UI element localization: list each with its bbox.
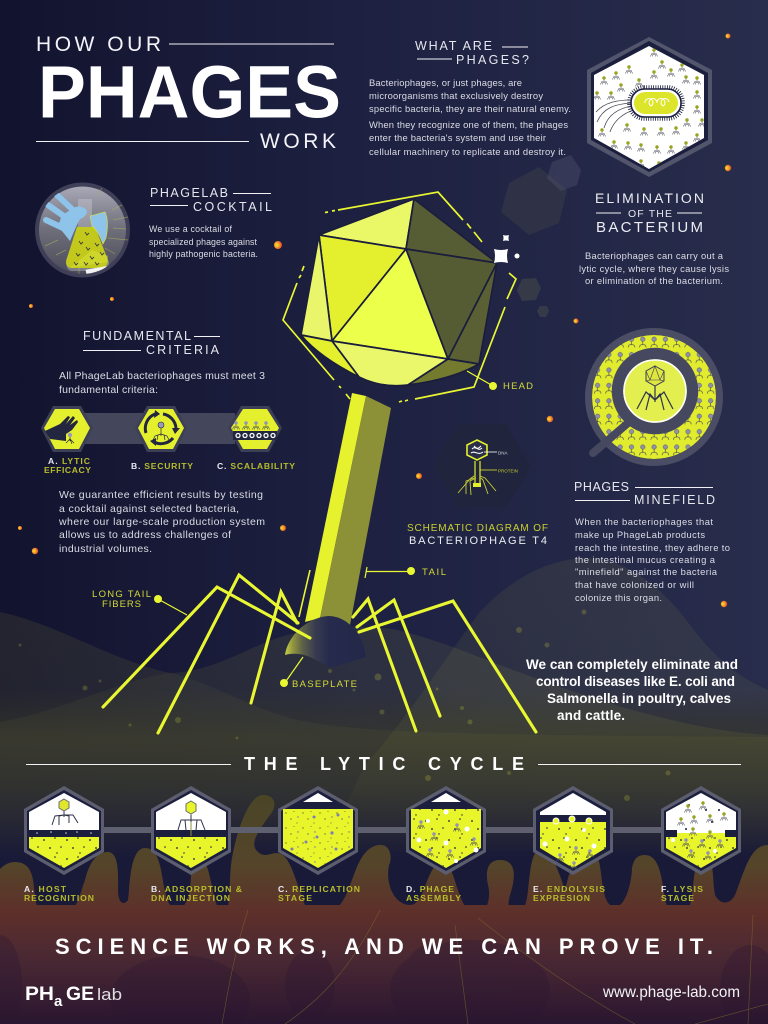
title <box>36 33 341 153</box>
heading: elimination of the bacterium: ELIMINATION <box>595 190 704 206</box>
logo: phagelab: PH <box>25 984 54 1005</box>
lytic cycle stage labels: B. ADSORPTION & <box>151 884 242 894</box>
text block: minefield: reach the intestine, they adhere to <box>575 542 730 553</box>
title: HOW OUR <box>36 33 161 56</box>
criteria labels: A. LYTIC <box>48 456 90 466</box>
label: head <box>467 371 533 392</box>
callout: disease statement <box>526 657 738 723</box>
label: tail <box>365 567 446 578</box>
text block: cocktail <box>149 224 258 259</box>
icon: bacterium surrounded by phages <box>587 37 712 177</box>
schematic hexagon backdrop <box>433 424 531 508</box>
panel: what are phages <box>369 39 571 157</box>
text block: cocktail: highly pathogenic bacteria. <box>149 249 258 259</box>
callout: disease statement: control diseases like E. coli and <box>536 674 735 689</box>
lytic cycle stage labels: STAGE <box>661 893 694 903</box>
criteria labels: C. SCALABILITY <box>217 461 295 471</box>
text block: minefield: colonize this organ. <box>575 592 662 603</box>
criteria labels: EFFICACY <box>44 465 91 475</box>
title: PHAGES <box>38 50 341 134</box>
label: long tail fibers <box>92 589 187 615</box>
label: baseplate <box>280 657 357 690</box>
label: long tail fibers: FIBERS <box>102 599 141 610</box>
heading: fundamental criteria: CRITERIA <box>146 343 220 357</box>
title: WORK <box>260 130 336 153</box>
text block: minefield: make up PhageLab products <box>575 529 705 540</box>
lytic cycle stage labels: C. REPLICATION <box>278 884 360 894</box>
text block: what are phages <box>369 77 571 157</box>
heading: phagelab cocktail: COCKTAIL <box>193 200 272 214</box>
baseplate <box>285 616 366 668</box>
text block: criteria results: industrial volumes. <box>59 543 152 555</box>
panel: elimination of the bacterium <box>579 190 729 286</box>
mini phage schematic: PROTEIN <box>498 468 518 474</box>
heading: the lytic cycle: THE LYTIC CYCLE <box>244 754 524 774</box>
lytic cycle stage labels: EXPRESION <box>533 893 590 903</box>
text block: what are phages: When they recognize one of them, the phages <box>369 119 568 130</box>
lytic cycle stage labels: RECOGNITION <box>24 893 94 903</box>
heading: elimination of the bacterium: OF THE <box>628 208 672 220</box>
label: tail: TAIL <box>422 567 446 578</box>
heading: fundamental criteria: FUNDAMENTAL <box>83 329 191 343</box>
text block: minefield: "minefield" against the bacteria <box>575 566 718 577</box>
schematic caption: BACTERIOPHAGE T4 <box>409 535 547 547</box>
head <box>301 199 497 386</box>
text block: cocktail: specialized phages against <box>149 237 258 247</box>
heading: what are phages <box>415 39 529 67</box>
stage D: phage assembly <box>406 786 486 875</box>
text block: minefield: the intestinal mucus creating a <box>575 554 716 565</box>
lytic cycle stage labels: E. ENDOLYSIS <box>533 884 605 894</box>
lytic cycle stage labels: F. LYSIS <box>661 884 703 894</box>
text block: elimination: or elimination of the bacterium. <box>585 275 723 286</box>
tagline: SCIENCE WORKS, AND WE CAN PROVE IT. <box>55 934 713 959</box>
text block: criteria results: where our large-scale production system <box>58 516 265 528</box>
tail <box>299 393 391 625</box>
heading: phages minefield: PHAGES <box>574 480 629 494</box>
panel: fundamental criteria <box>41 329 295 555</box>
text block: cocktail: We use a cocktail of <box>149 224 233 234</box>
criteria labels <box>44 456 295 475</box>
background waves <box>0 558 768 860</box>
lytic cycle stage labels: D. PHAGE <box>406 884 454 894</box>
criteria labels: B. SECURITY <box>131 461 193 471</box>
label: head: HEAD <box>503 381 533 392</box>
mini phage schematic: DNA <box>498 450 508 456</box>
lytic cycle stage labels: STAGE <box>278 893 312 903</box>
heading: what are phages: PHAGES? <box>456 53 529 67</box>
logo: phagelab <box>25 984 122 1010</box>
text block: elimination <box>579 250 729 286</box>
text block: criteria results: a cocktail against selected bacteria, <box>59 503 239 515</box>
stage A: host recognition <box>24 786 104 875</box>
text block: criteria results: allows us to address challenges of <box>59 529 231 541</box>
text block: minefield: that have colonized or will <box>575 579 694 590</box>
label: long tail fibers: LONG TAIL <box>92 589 151 600</box>
logo: phagelab: a <box>54 993 63 1010</box>
icon: security cycle <box>135 406 187 452</box>
text block: criteria results <box>58 489 265 555</box>
gut flame shapes <box>0 795 768 1024</box>
panel: phagelab cocktail <box>35 182 272 278</box>
text block: what are phages: cellular machinery to replicate and destroy it. <box>369 146 566 157</box>
icon: scalability conveyor <box>228 406 282 452</box>
schematic diagram of bacteriophage T4 <box>407 424 548 547</box>
text block: what are phages: microorganisms that exclusively destroy <box>369 90 543 101</box>
stage E: endolysis expresion <box>533 786 613 875</box>
lytic cycle stage labels: A. HOST <box>24 884 67 894</box>
text block: elimination: Bacteriophages can carry out a <box>585 250 724 261</box>
sparkle highlights <box>494 235 520 263</box>
text block: criteria intro: fundamental criteria: <box>59 384 158 396</box>
text block: what are phages: specific bacteria, they are their natural enemy. <box>369 103 571 114</box>
lytic cycle stage labels: ASSEMBLY <box>406 893 461 903</box>
background olive dots <box>18 610 670 801</box>
heading: phagelab cocktail <box>150 186 272 214</box>
icon: gloved hand holding flask <box>35 182 130 278</box>
callout: disease statement: We can completely eliminate and <box>526 657 738 672</box>
icon: magnifier over phage minefield <box>588 332 720 462</box>
mini phage schematic <box>458 440 518 495</box>
text block: criteria intro: All PhageLab bacteriophages must meet 3 <box>59 370 265 382</box>
text block: criteria intro <box>59 370 265 396</box>
schematic caption <box>407 523 548 547</box>
bacteriophage T4 illustration <box>103 192 536 733</box>
heading: what are phages: WHAT ARE <box>415 39 492 53</box>
logo: phagelab: GE <box>66 984 94 1005</box>
decorative orange particles <box>18 34 731 607</box>
heading: phages minefield <box>574 480 715 507</box>
heading: elimination of the bacterium <box>595 190 704 236</box>
lytic cycle stage labels <box>24 884 703 903</box>
label: baseplate: BASEPLATE <box>292 679 357 690</box>
panel: phages minefield <box>574 480 730 603</box>
heading: phages minefield: MINEFIELD <box>634 493 715 507</box>
decorative hexagons <box>501 155 581 317</box>
criteria connector band <box>85 413 235 444</box>
logo: phagelab: lab <box>97 985 122 1004</box>
text block: what are phages: Bacteriophages, or just phages, are <box>369 77 522 88</box>
stage F: lysis <box>661 786 741 875</box>
text block: minefield: When the bacteriophages that <box>575 516 713 527</box>
stage C: replication <box>278 786 358 875</box>
callout: disease statement: and cattle. <box>557 708 625 723</box>
stage B: adsorption and DNA injection <box>151 786 231 875</box>
cycle connector bar <box>64 827 701 833</box>
text block: elimination: lytic cycle, where they cause lysis <box>579 263 729 274</box>
heading: phagelab cocktail: PHAGELAB <box>150 186 228 200</box>
website url: www.phage-lab.com <box>602 984 740 1001</box>
heading: elimination of the bacterium: BACTERIUM <box>596 219 703 236</box>
panel: lytic cycle stages <box>24 786 741 875</box>
callout: disease statement: Salmonella in poultry, calves <box>547 691 731 706</box>
schematic caption: SCHEMATIC DIAGRAM OF <box>407 523 548 534</box>
text block: minefield <box>575 516 730 603</box>
heading: fundamental criteria <box>83 329 220 357</box>
dashed head outline <box>283 192 516 402</box>
text block: what are phages: enter the bacteria's system and use their <box>369 132 546 143</box>
text block: criteria results: We guarantee efficient results by testing <box>59 489 263 501</box>
icon: lytic efficacy hand <box>41 406 93 452</box>
lytic cycle stage labels: DNA INJECTION <box>151 893 230 903</box>
long tail fibers <box>103 575 536 733</box>
